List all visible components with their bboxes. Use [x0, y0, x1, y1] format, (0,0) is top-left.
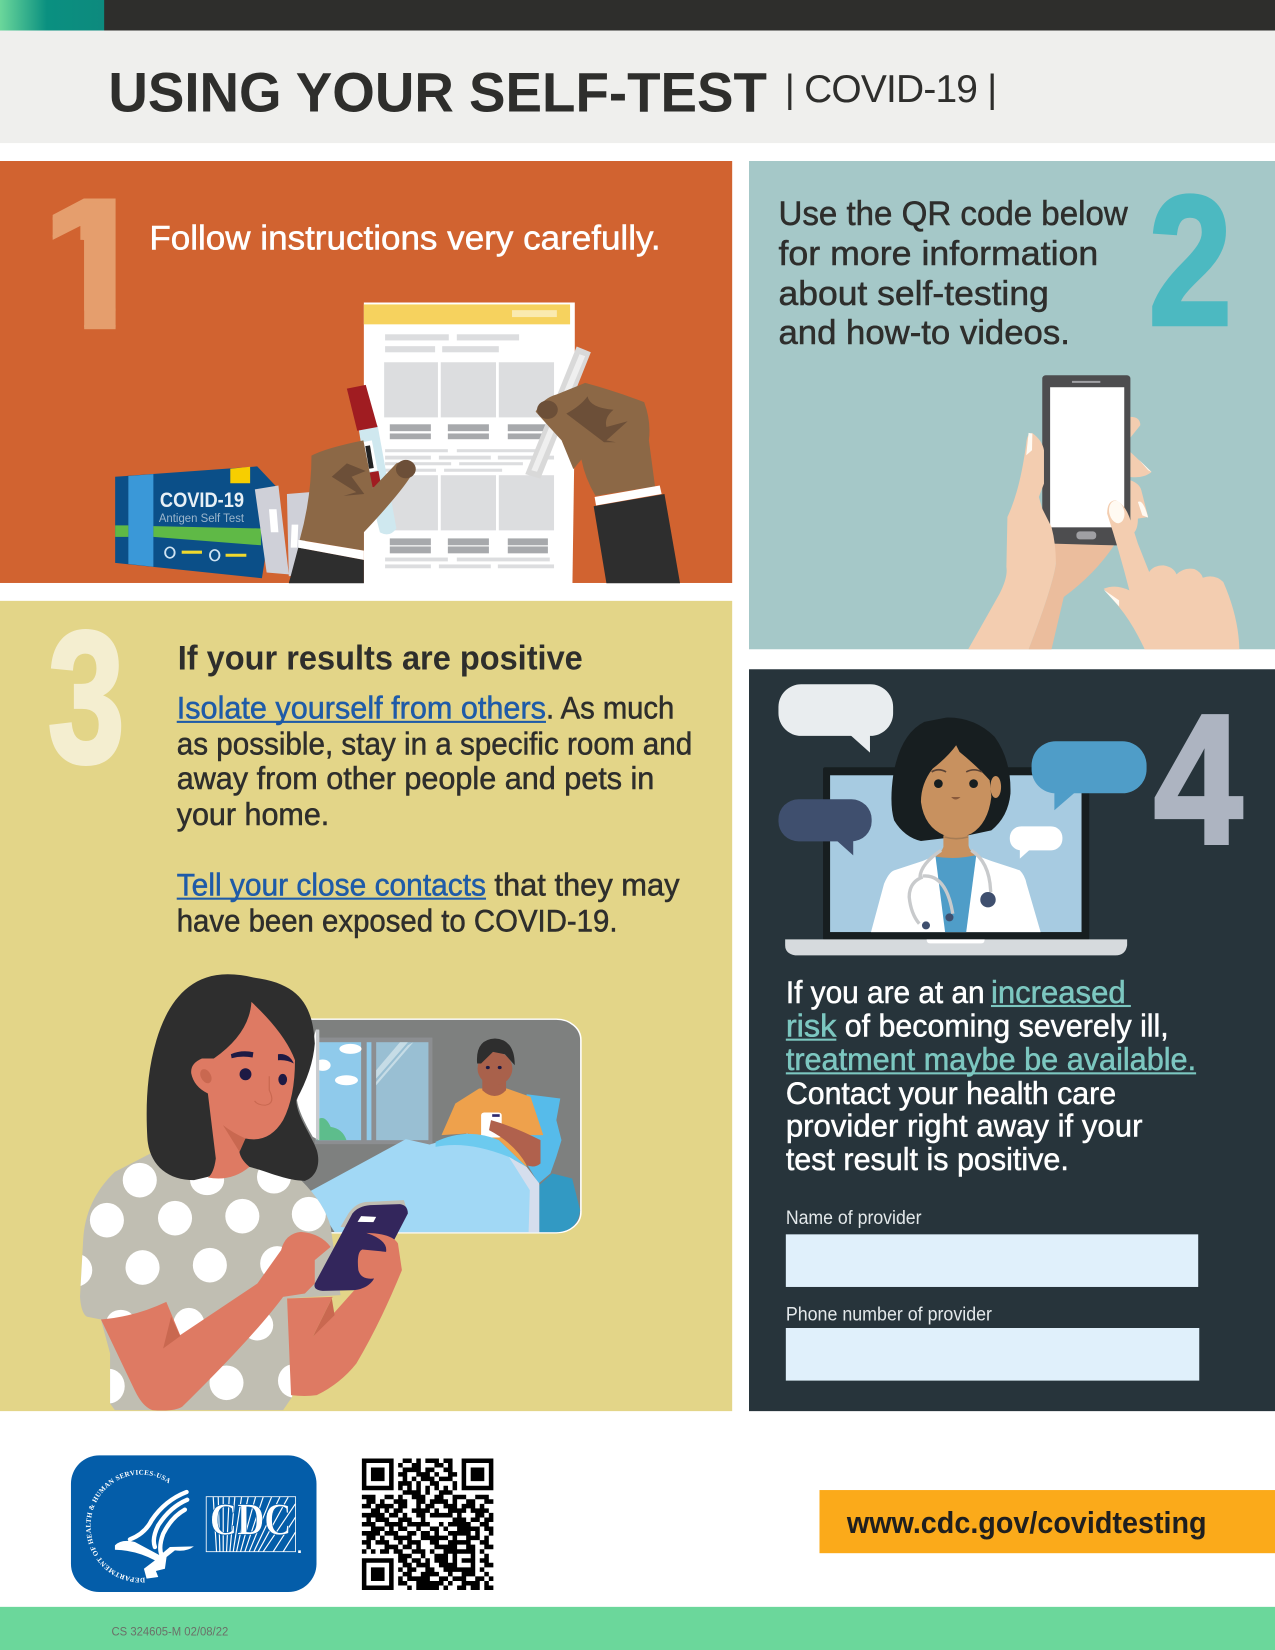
provider name field: Name of provider [786, 1208, 922, 1229]
speech bubble: light [778, 684, 893, 753]
step 3 text: Isolate yourself from others [177, 690, 546, 726]
bedroom scene [277, 1019, 581, 1233]
step 4 text: increased [991, 974, 1126, 1010]
step 4 text: Contact your health care [786, 1075, 1116, 1111]
step 4 text [786, 974, 1196, 1177]
step 3 text: away from other people and pets in [177, 760, 654, 796]
footer bar [0, 1607, 1275, 1650]
panel: step 2 [749, 158, 1275, 649]
illustration: doctor on a laptop [778, 684, 1147, 955]
footer bar: CS 324605-M 02/08/22 [112, 1624, 229, 1638]
woman hand [287, 1233, 402, 1396]
pointing hand [1104, 499, 1239, 649]
step 4 text: risk [786, 1008, 837, 1044]
number 3: 3 [48, 592, 125, 802]
blood tube [347, 385, 396, 534]
panel: step 4 [749, 669, 1275, 1411]
left hand and sleeve [289, 440, 416, 583]
kit box label: Antigen Self Test [159, 513, 245, 525]
provider phone field: Phone number of provider [786, 1305, 992, 1326]
instruction sheet [364, 303, 575, 583]
step 3 text: that they may [494, 866, 680, 903]
laptop [785, 767, 1127, 955]
step 4 text: of becoming severely ill, [845, 1008, 1169, 1044]
URL callout [819, 1490, 1275, 1553]
woman phone [314, 1200, 408, 1291]
step 3 text: as possible, stay in a specific room and [177, 725, 692, 761]
step 3 text [177, 690, 692, 938]
step 4 text: provider right away if your [786, 1107, 1142, 1143]
step 3 text: . As much [546, 690, 674, 726]
holding hand [968, 433, 1114, 649]
right hand and sleeve [536, 383, 680, 583]
number 2: 2 [1149, 158, 1232, 364]
illustration: test kit, instructions and hands [115, 303, 680, 583]
step 2 text [778, 195, 1129, 352]
provider name field [786, 1208, 1198, 1287]
step 2 text: Use the QR code below [778, 195, 1129, 233]
step 1 text: Follow instructions very carefully. [149, 219, 661, 257]
step 4 text: treatment maybe be available. [786, 1041, 1196, 1077]
kit box label [159, 489, 245, 525]
test strip [525, 347, 591, 479]
step 3 text: Tell your close contacts [177, 866, 486, 903]
speech bubble: white [1010, 826, 1062, 859]
panel: step 1 [0, 161, 732, 583]
panel: step 3 [0, 592, 732, 1411]
step 4 text: test result is positive. [786, 1141, 1069, 1177]
QR code [362, 1458, 493, 1590]
step 3 text: your home. [177, 796, 329, 832]
header band [0, 31, 1275, 143]
step 2 text: about self-testing [778, 275, 1049, 313]
woman shirt [58, 1154, 341, 1410]
step 2 text: and how-to videos. [778, 314, 1070, 352]
phone [1042, 375, 1130, 545]
step 3 heading: If your results are positive [178, 639, 583, 677]
kit box label: COVID-19 [160, 489, 244, 512]
HHS seal: DEPARTMENT OF HEALTH & HUMAN SERVICES-USA [86, 1470, 170, 1582]
speech bubble: navy [778, 799, 872, 855]
title: USING YOUR SELF-TEST [108, 62, 767, 124]
woman arm [101, 1232, 331, 1411]
step 3 text: have been exposed to COVID-19. [177, 902, 618, 938]
CDC mark: CDC [210, 1494, 292, 1544]
number 1: 1 [30, 161, 156, 367]
illustration: woman using phone, man isolating in bed [58, 974, 581, 1411]
illustration: hands holding a smartphone [968, 375, 1239, 649]
step 2 text: for more information [778, 235, 1098, 273]
speech bubble: blue [1032, 741, 1147, 810]
number 4: 4 [1154, 677, 1242, 883]
man's arm [489, 1120, 540, 1167]
subtitle: | COVID-19 | [785, 68, 997, 111]
step 4 text: If you are at an [786, 974, 985, 1010]
logo: HHS and CDC [70, 1455, 316, 1592]
URL callout: www.cdc.gov/covidtesting [846, 1506, 1207, 1540]
test kit box [115, 466, 310, 578]
man in bed [442, 1039, 543, 1167]
top bar [0, 0, 1275, 31]
doctor [871, 718, 1041, 932]
woman hair and face [147, 974, 318, 1181]
phone fingers [1130, 417, 1152, 534]
provider phone field [786, 1305, 1199, 1381]
